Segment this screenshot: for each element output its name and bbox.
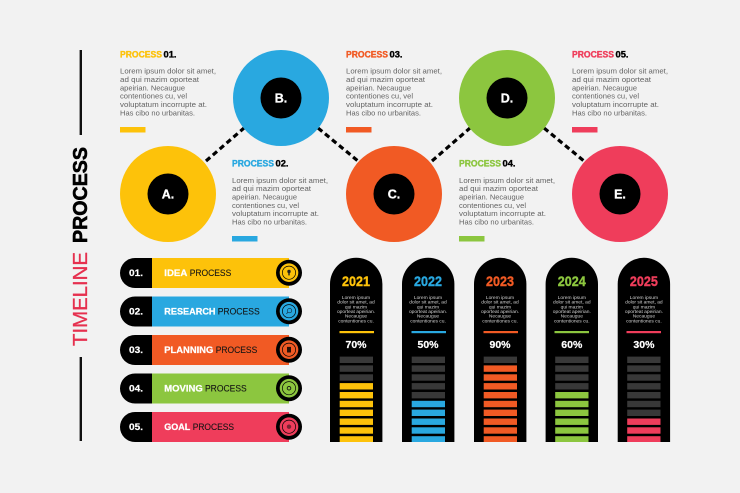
column 2022: contentiones cu. [410, 318, 446, 324]
vertical title: PROCESS [70, 147, 92, 243]
column 2024: qui mazim [561, 304, 583, 310]
row 02: research process: 02. [129, 306, 143, 318]
process 02 block: Has cibo no urbanitas. [232, 218, 307, 226]
column 2025: Necaugue [633, 314, 655, 320]
process 02 block: voluptatum incorrupte at. [232, 209, 319, 218]
icon: ring [276, 375, 302, 401]
column 2023: contentiones cu. [482, 318, 518, 324]
row 05: goal process [120, 412, 302, 442]
process 01 block: voluptatum incorrupte at. [120, 100, 207, 109]
circle D: D. [501, 92, 513, 106]
icon: document [276, 337, 302, 363]
process 04 block: PROCESS [459, 159, 501, 169]
column 2024: Lorem ipsum [558, 295, 586, 301]
process 04 block: apeirian. Necaugue [459, 192, 524, 202]
column 2022: qui mazim [417, 304, 439, 310]
process 03 block: Has cibo no urbanitas. [346, 108, 421, 117]
process 05 block: PROCESS [572, 50, 614, 60]
process 04 block [459, 159, 555, 242]
process 05 block: ad qui mazim oporteat [572, 75, 651, 84]
circle A [120, 146, 216, 242]
process 03 block [346, 50, 442, 132]
column 2024: oporteat apeirian. [553, 309, 591, 315]
column 2023: Lorem ipsum [486, 295, 514, 301]
column 2021: oporteat apeirian. [337, 309, 375, 315]
column 2021: contentiones cu. [338, 318, 374, 324]
column 2024: dolor sit amet, ad [553, 300, 591, 306]
circle D [459, 50, 555, 146]
row 05: goal process: 05. [129, 422, 143, 433]
process 04 block: voluptatum incorrupte at. [459, 209, 546, 218]
vertical title [70, 50, 92, 441]
row 01: idea process: IDEA [164, 268, 187, 279]
column 2021: 70% [345, 339, 367, 351]
column 2024: Necaugue [561, 314, 583, 320]
process 01 block: 01. [164, 50, 176, 60]
column 2024: 2024 [558, 273, 586, 289]
process 02 block: PROCESS [232, 159, 274, 169]
column 2025: 2025 [630, 273, 658, 289]
column 2025: contentiones cu. [626, 318, 662, 324]
process 03 block: ad qui mazim oporteat [346, 75, 425, 84]
process 02 block: contentiones cu, vel [232, 201, 299, 210]
row 02: research process [120, 296, 302, 326]
process 01 block [120, 50, 216, 132]
column 2025: Lorem ipsum [630, 295, 658, 301]
process 02 block: apeirian. Necaugue [232, 192, 297, 202]
column 2023: qui mazim [489, 304, 511, 310]
column 2023: dolor sit amet, ad [481, 300, 519, 306]
process 05 block: voluptatum incorrupte at. [572, 100, 659, 109]
row 05: goal process: PROCESS [193, 422, 234, 433]
process 05 block: contentiones cu, vel [572, 92, 639, 101]
column 2023: Necaugue [489, 314, 511, 320]
row 01: idea process [120, 258, 302, 288]
process 03 block: Lorem ipsum dolor sit amet, [346, 67, 442, 76]
process 05 block: Lorem ipsum dolor sit amet, [572, 67, 668, 76]
vertical title: TIMELINE [70, 252, 92, 346]
column 2021: Lorem ipsum [342, 295, 370, 301]
column 2025: oporteat apeirian. [625, 309, 663, 315]
process 03 block: contentiones cu, vel [346, 92, 413, 101]
column 2024: 60% [561, 339, 583, 351]
process 04 block: ad qui mazim oporteat [459, 184, 538, 193]
process 05 block [572, 50, 668, 132]
column 2023: 2023 [486, 273, 514, 289]
column 2021 [330, 258, 382, 442]
process 03 block: apeirian. Necaugue [346, 83, 411, 92]
circle B [233, 50, 329, 146]
column 2023 [474, 258, 526, 442]
circle C [346, 146, 442, 242]
process 05 block: 05. [616, 50, 628, 60]
circle E: E. [614, 188, 626, 202]
column 2025: qui mazim [633, 304, 655, 310]
process 02 block: 02. [276, 159, 288, 169]
row 03: planning process: PROCESS [216, 345, 257, 356]
column 2024: contentiones cu. [554, 318, 590, 324]
process 04 block: Lorem ipsum dolor sit amet, [459, 176, 555, 185]
row 03: planning process: PLANNING [164, 345, 213, 356]
process 01 block: apeirian. Necaugue [120, 83, 185, 92]
process 05 block: apeirian. Necaugue [572, 83, 637, 92]
circle E [572, 146, 668, 242]
process 01 block: PROCESS [120, 50, 162, 60]
column 2023: oporteat apeirian. [481, 309, 519, 315]
column 2022: Necaugue [417, 314, 439, 320]
row 01: idea process: PROCESS [190, 268, 231, 279]
column 2021: Necaugue [345, 314, 367, 320]
column 2023: 90% [489, 339, 511, 351]
process 05 block: Has cibo no urbanitas. [572, 108, 647, 117]
circle A: A. [162, 188, 174, 202]
process 04 block: contentiones cu, vel [459, 201, 526, 210]
icon: target [276, 414, 302, 440]
row 04: moving process: MOVING [164, 384, 203, 394]
process 03 block: voluptatum incorrupte at. [346, 100, 433, 109]
column 2022: oporteat apeirian. [409, 309, 447, 315]
circle B: B. [275, 92, 287, 106]
icon: keyhole [276, 260, 302, 286]
column 2021: dolor sit amet, ad [337, 300, 375, 306]
process 02 block [232, 159, 328, 242]
icon: magnifier [276, 298, 302, 324]
process 01 block: ad qui mazim oporteat [120, 75, 199, 84]
column 2022: dolor sit amet, ad [409, 300, 447, 306]
column 2022: 50% [417, 339, 439, 351]
row 04: moving process [120, 374, 302, 404]
column 2025: dolor sit amet, ad [625, 300, 663, 306]
column 2022: 2022 [414, 273, 442, 289]
process 04 block: Has cibo no urbanitas. [459, 218, 534, 226]
row 03: planning process [120, 335, 302, 365]
column 2022: Lorem ipsum [414, 295, 442, 301]
row 03: planning process: 03. [129, 345, 143, 356]
process 03 block: PROCESS [346, 50, 388, 60]
row 04: moving process: 04. [129, 384, 143, 394]
row 02: research process: RESEARCH [164, 306, 216, 318]
process 02 block: ad qui mazim oporteat [232, 184, 311, 193]
process 03 block: 03. [390, 50, 402, 60]
column 2021: 2021 [342, 273, 370, 289]
circle C: C. [388, 188, 400, 202]
column 2022 [402, 258, 454, 442]
row 02: research process: PROCESS [218, 306, 260, 318]
process 01 block: contentiones cu, vel [120, 92, 187, 101]
process 01 block: Has cibo no urbanitas. [120, 108, 195, 117]
column 2025 [618, 258, 670, 442]
row 01: idea process: 01. [129, 268, 143, 279]
dashed connectors [206, 128, 584, 161]
process 01 block: Lorem ipsum dolor sit amet, [120, 67, 216, 76]
row 04: moving process: PROCESS [205, 384, 247, 394]
column 2024 [546, 258, 598, 442]
process 04 block: 04. [502, 159, 516, 169]
row 05: goal process: GOAL [164, 422, 190, 433]
process 02 block: Lorem ipsum dolor sit amet, [232, 176, 328, 185]
column 2025: 30% [633, 339, 655, 351]
column 2021: qui mazim [345, 304, 367, 310]
